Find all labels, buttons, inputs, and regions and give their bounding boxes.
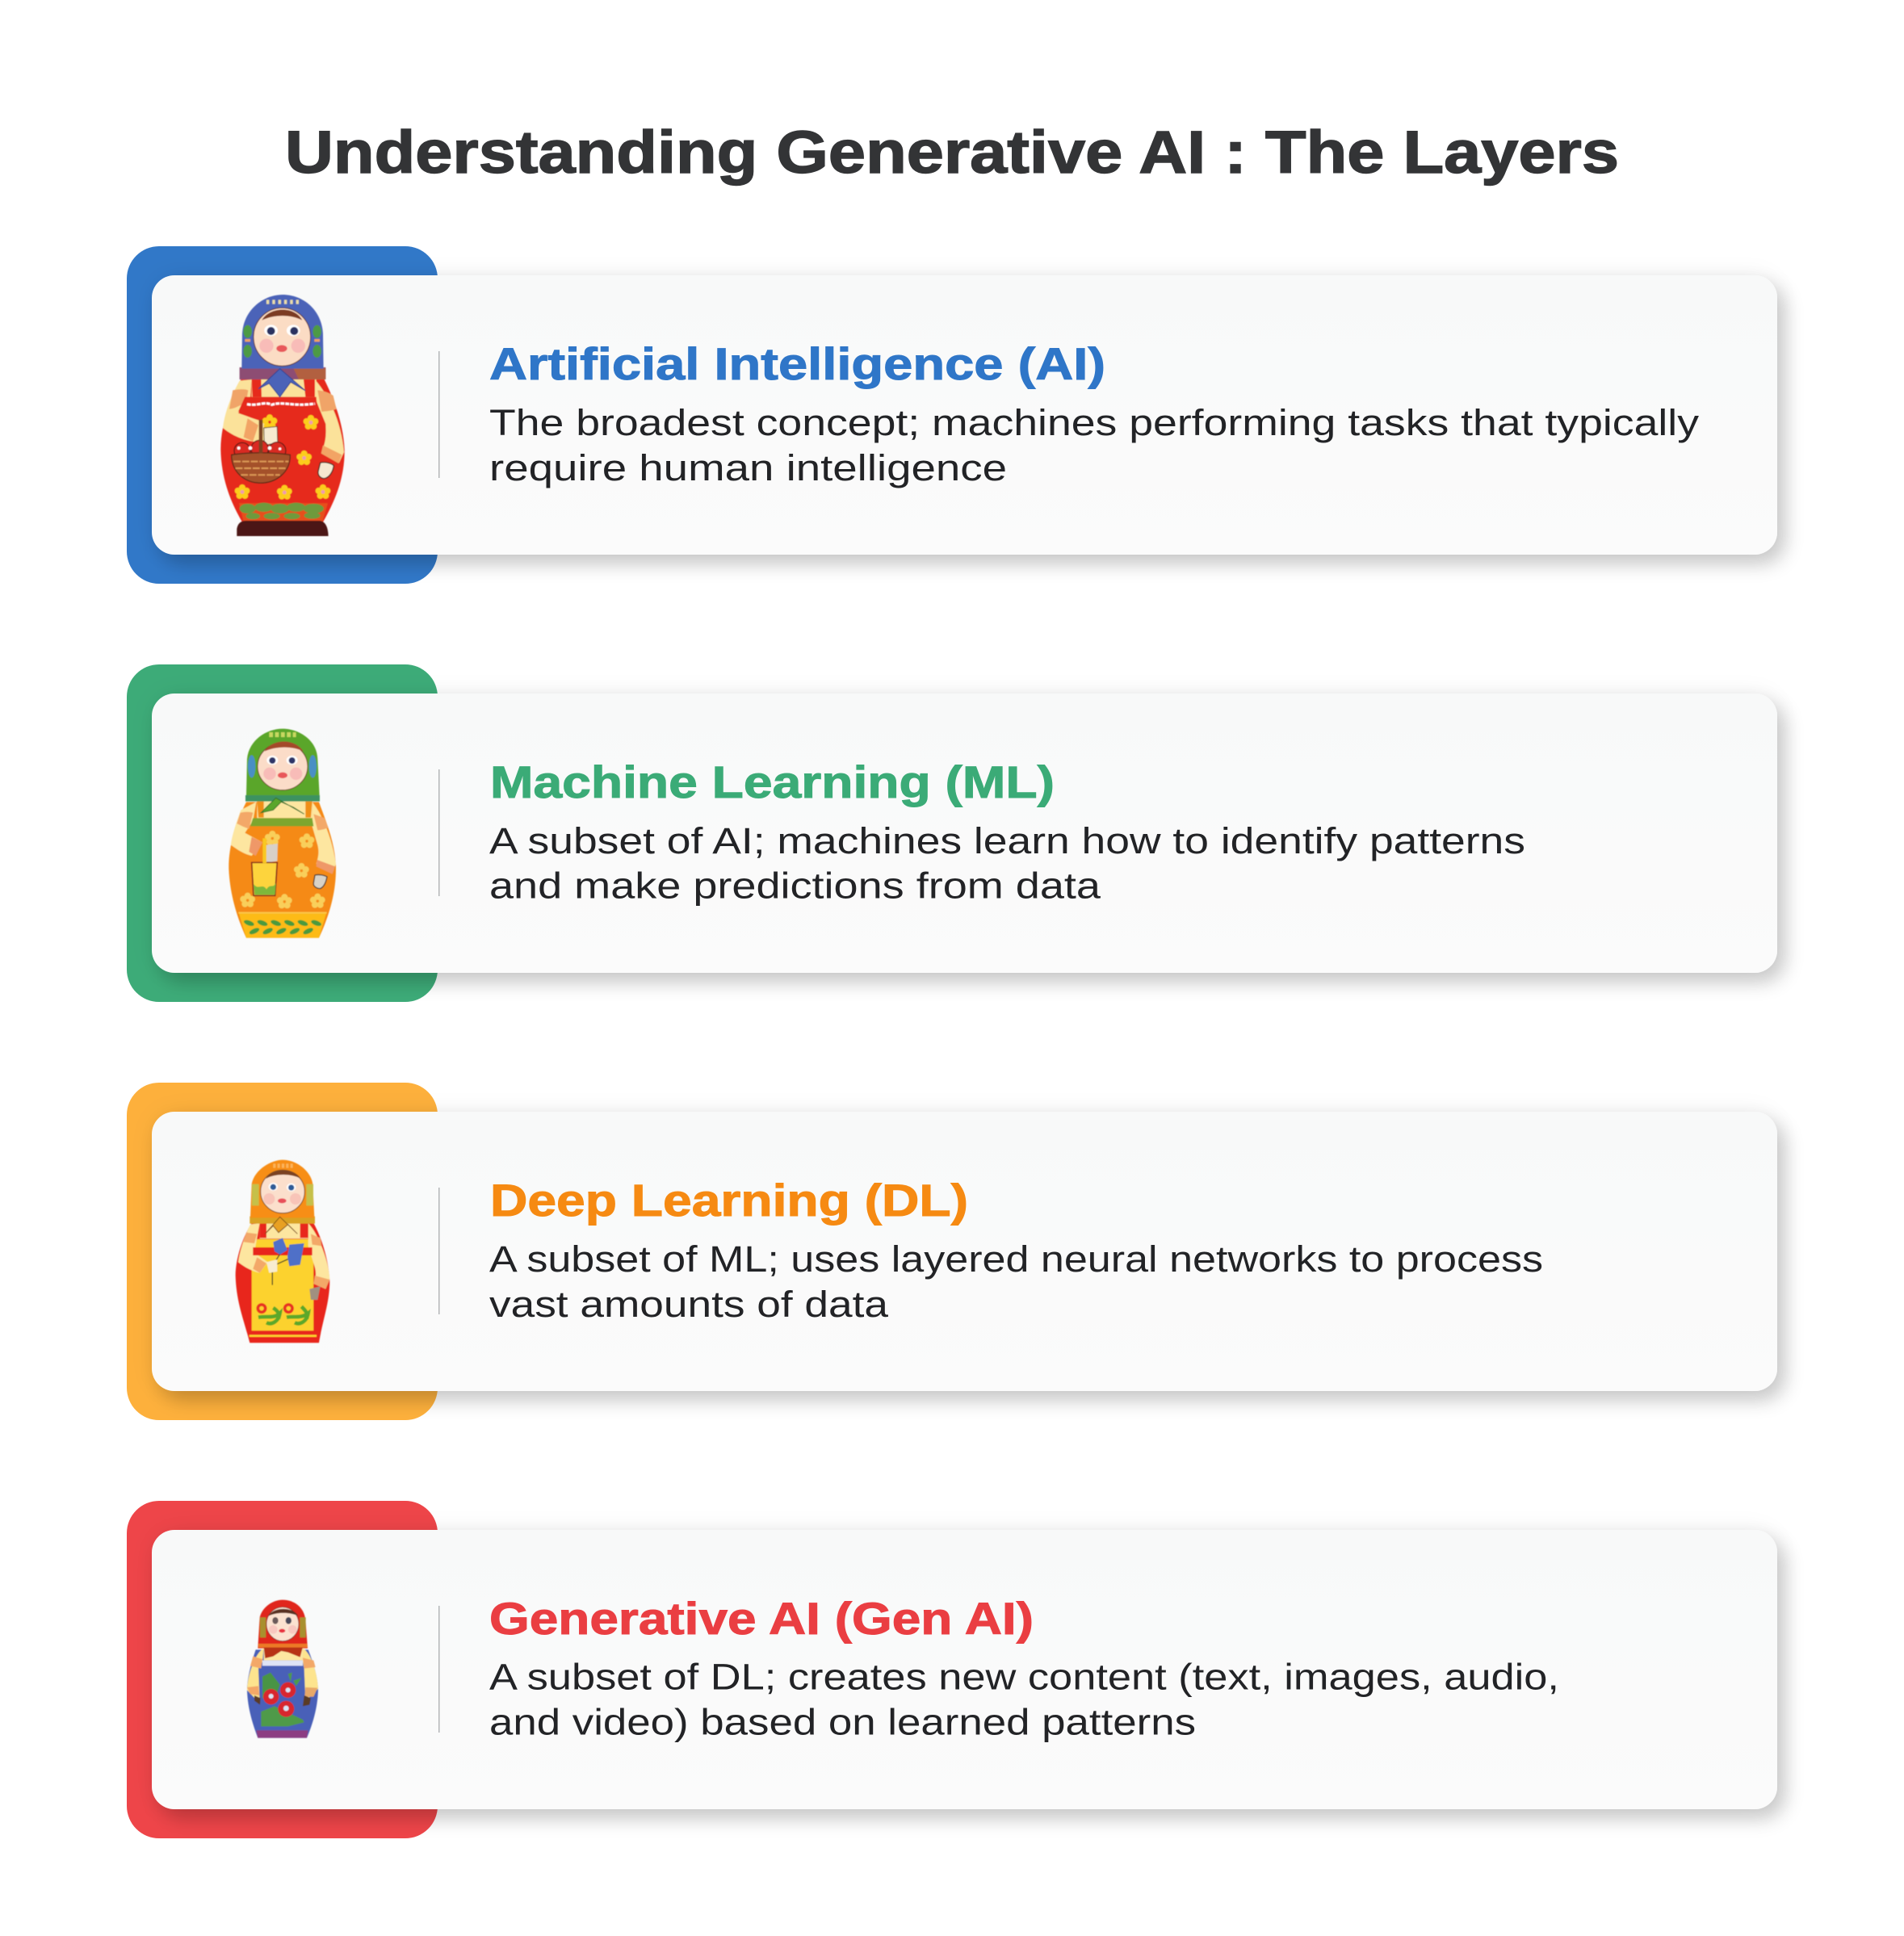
description — [489, 402, 1700, 488]
divider — [438, 351, 439, 478]
panel: generative ai — [127, 1501, 1777, 1838]
description — [489, 1657, 1559, 1742]
description: vast amounts of data — [489, 1284, 889, 1325]
colored tab: orange — [127, 1083, 438, 1420]
heading: Deep Learning (DL) — [490, 1175, 968, 1226]
description: require human intelligence — [489, 447, 1007, 488]
card — [152, 694, 1777, 973]
panel: deep learning — [127, 1083, 1777, 1420]
title: Understanding Generative AI : The Layers — [285, 119, 1619, 186]
description: and video) based on learned patterns — [489, 1702, 1196, 1742]
description — [489, 820, 1525, 906]
description: and make predictions from data — [489, 865, 1101, 906]
divider — [438, 769, 439, 896]
colored tab: green — [127, 664, 438, 1002]
colored tab: blue — [127, 246, 438, 584]
heading: Generative AI (Gen AI) — [489, 1593, 1034, 1644]
card — [152, 1112, 1777, 1391]
card — [152, 1530, 1777, 1809]
description: A subset of ML; uses layered neural networks to process — [489, 1238, 1543, 1280]
divider — [438, 1188, 439, 1314]
panel: artificial intelligence — [127, 246, 1777, 584]
divider — [438, 1606, 439, 1733]
heading: Artificial Intelligence (AI) — [489, 338, 1105, 389]
description: The broadest concept; machines performing tasks that typically — [489, 402, 1700, 443]
description: A subset of AI; machines learn how to identify patterns — [489, 820, 1525, 861]
description: A subset of DL; creates new content (text, images, audio, — [489, 1657, 1559, 1697]
icon: small blue nesting doll with red scarf — [247, 1600, 318, 1738]
heading: Machine Learning (ML) — [490, 756, 1055, 807]
colored tab: red — [127, 1501, 438, 1838]
description — [489, 1238, 1543, 1325]
card — [152, 275, 1777, 555]
icon: orange nesting doll with green scarf — [229, 729, 336, 938]
panel: machine learning — [127, 664, 1777, 1002]
icon: red and yellow nesting doll with orange scarf — [236, 1160, 329, 1343]
icon: large red nesting doll with blue scarf — [220, 295, 345, 536]
